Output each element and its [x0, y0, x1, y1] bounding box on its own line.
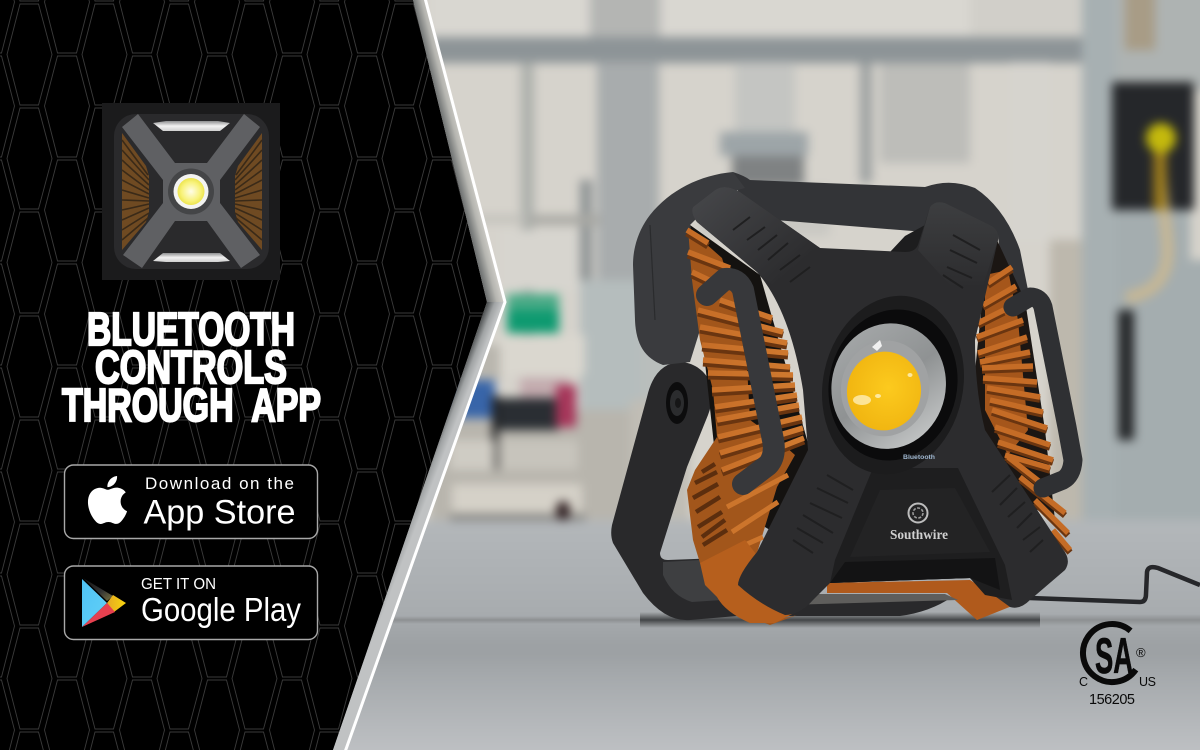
- text: google play: Google Play: [141, 591, 301, 628]
- app icon: [102, 103, 280, 280]
- text: download on the: Download on the: [145, 474, 294, 493]
- left bumper: [633, 172, 745, 365]
- icon: centre lens: [168, 168, 214, 214]
- icon: top light bar: [153, 121, 230, 131]
- Southwire logo: Southwire: [890, 527, 948, 542]
- App Store button: [64, 465, 318, 538]
- icon: apple: [88, 476, 127, 524]
- CSA certification mark: C: [1079, 675, 1088, 689]
- icon: left fins: [122, 133, 149, 250]
- CSA certification mark: ®: [1136, 645, 1146, 660]
- icon: X frame: [122, 114, 260, 268]
- left grip handle: [707, 279, 774, 484]
- icon: play triangle: [82, 578, 126, 627]
- upper-right arm: [918, 202, 998, 310]
- title: Bluetooth controls through app: [62, 303, 321, 431]
- right grip handle: [1013, 297, 1073, 488]
- silver glass band and white chevron line: [333, 0, 505, 750]
- rear frame and top handle: [733, 172, 1030, 300]
- yellow LED chip: [841, 340, 927, 436]
- text: get it on: GET IT ON: [141, 576, 216, 593]
- left black panel with hexagon pattern: [0, 0, 487, 750]
- title: Bluetooth controls through app: THROUGH APP: [62, 379, 321, 431]
- stand pivot button: [666, 382, 688, 424]
- left orange cooling fins: [687, 230, 804, 548]
- lower plate: [830, 468, 1012, 600]
- CSA certification mark: US: [1139, 675, 1156, 689]
- folding stand: [611, 362, 952, 620]
- Google Play button: [64, 566, 318, 640]
- text: app store: App Store: [144, 494, 296, 532]
- Bluetooth badge: Bluetooth: [903, 454, 935, 461]
- Southwire logo: [890, 504, 948, 542]
- icon: right fins: [235, 133, 262, 250]
- CSA certification mark: SA: [1095, 628, 1133, 684]
- CSA certification mark: [1079, 624, 1156, 708]
- title: Bluetooth controls through app: BLUETOOTH: [87, 303, 295, 355]
- right orange cooling fins: [977, 267, 1070, 552]
- orange lower shell: [700, 540, 800, 623]
- CSA certification mark: 156205: [1089, 692, 1135, 708]
- power cord: [1030, 567, 1200, 602]
- grip ridges: [733, 217, 1043, 553]
- right fin backing: [970, 225, 1055, 520]
- main X housing: [692, 187, 1068, 615]
- silver reflector ring: [820, 313, 958, 460]
- upper-left arm highlight: [692, 187, 825, 300]
- floor shadow lines: [350, 612, 1200, 628]
- left fin backing: [690, 225, 810, 530]
- title: Bluetooth controls through app: CONTROLS: [95, 341, 287, 393]
- work light product: [611, 172, 1073, 625]
- light recess: [806, 282, 980, 488]
- icon: bottom light bar: [153, 253, 230, 262]
